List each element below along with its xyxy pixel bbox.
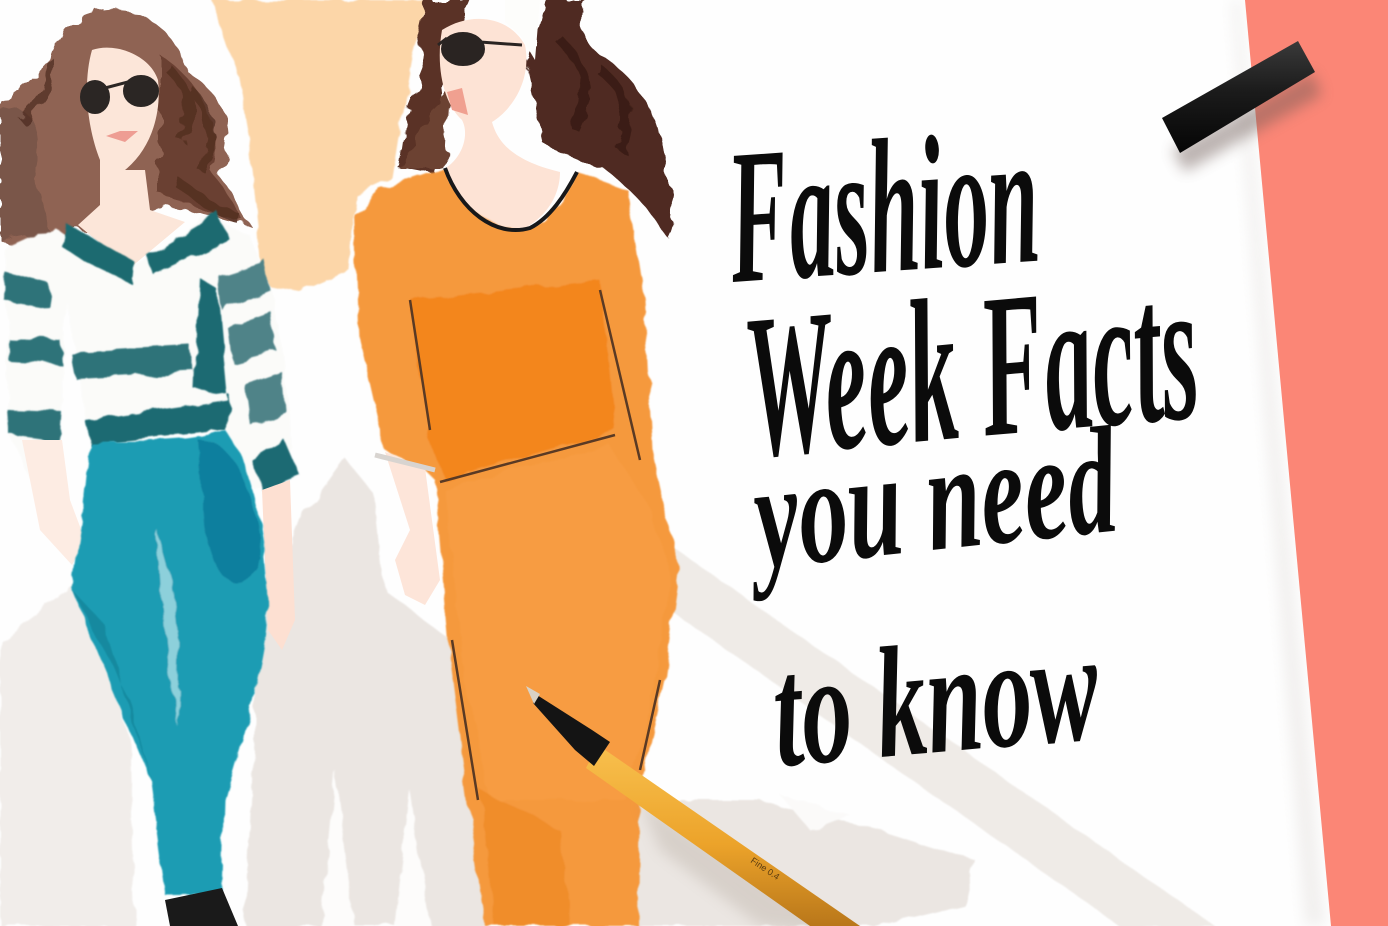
arms — [22, 440, 85, 565]
floor shadows — [0, 458, 1215, 926]
icon: black marker cap — [1162, 41, 1322, 172]
striped top — [5, 215, 295, 490]
peach watercolor wash — [212, 0, 428, 292]
lips — [106, 131, 138, 142]
face — [440, 19, 560, 235]
hair — [398, 0, 674, 238]
orange dress — [355, 168, 680, 926]
title line: to know: to know — [766, 596, 1106, 800]
stripes — [4, 212, 300, 490]
teal trousers — [72, 430, 268, 895]
arm and hand — [385, 452, 440, 605]
face and neck — [78, 48, 185, 268]
sunglasses — [438, 33, 522, 65]
coral panel — [1232, 0, 1388, 926]
lips — [447, 88, 468, 115]
icon: yellow pen: Fine 0.4 — [749, 855, 781, 882]
title line: you need: you need — [735, 396, 1126, 603]
hair back — [0, 10, 250, 285]
title line: Week Facts: Week Facts — [736, 235, 1207, 501]
figure: right woman — [355, 0, 680, 926]
title — [720, 90, 1207, 800]
title line: Fashion: Fashion — [720, 90, 1045, 324]
boots — [165, 888, 238, 926]
figure: left woman — [0, 10, 300, 926]
icon: yellow pen — [526, 686, 860, 926]
sunglasses — [81, 76, 158, 113]
